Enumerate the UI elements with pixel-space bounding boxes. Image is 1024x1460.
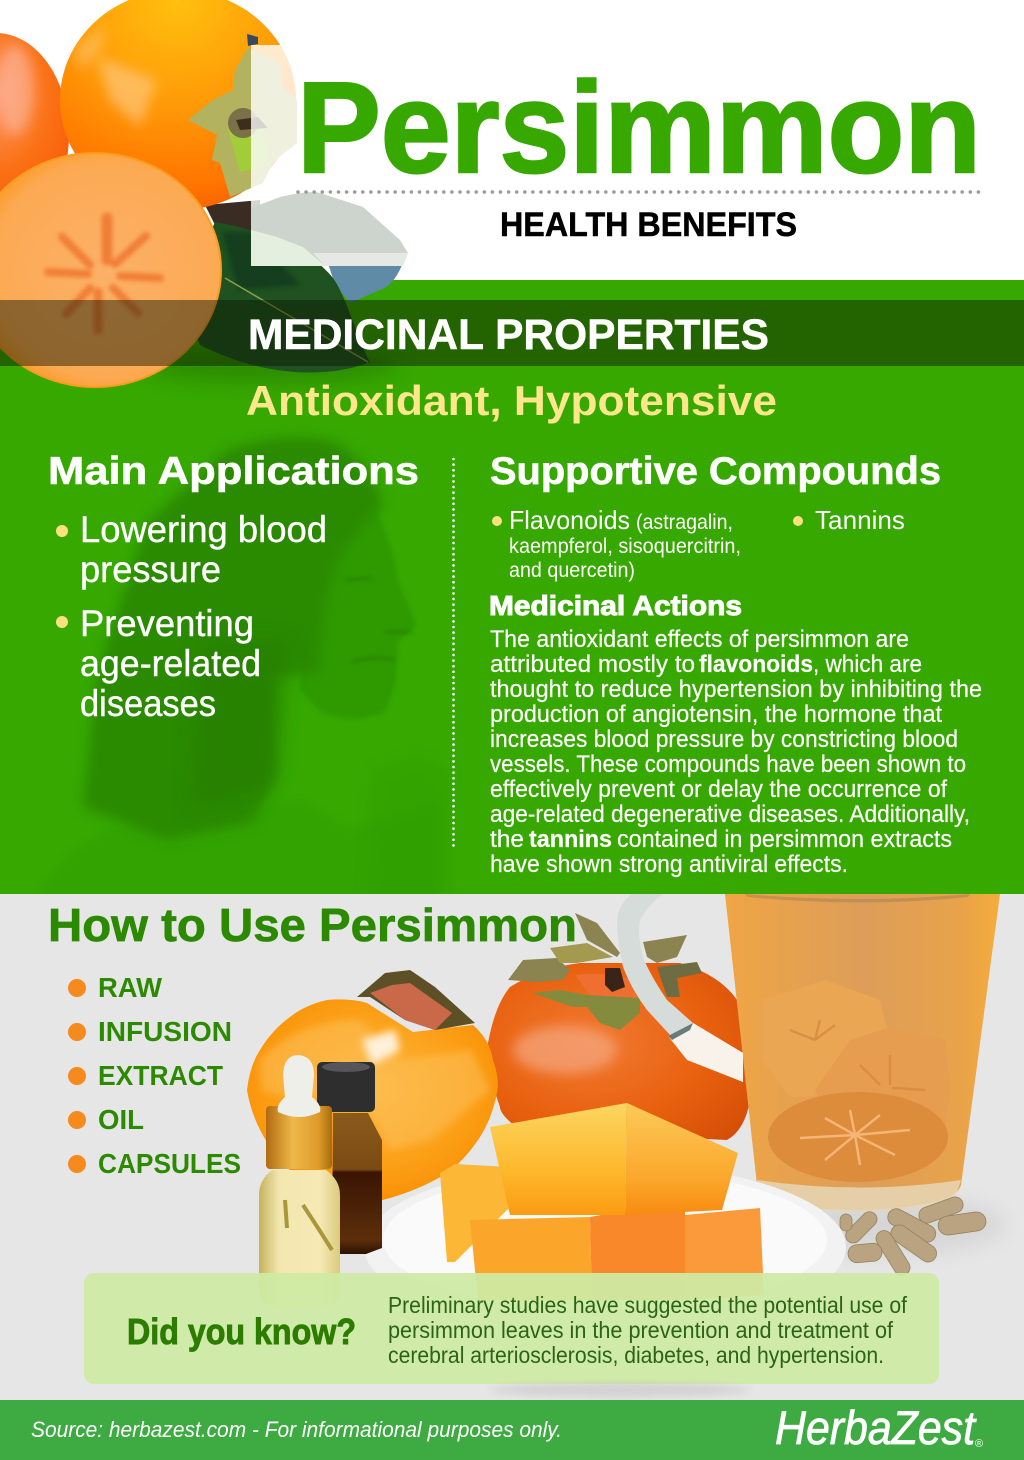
- shadow under main fruit: [205, 200, 260, 232]
- logo: HerbaZest: HerbaZest: [775, 1401, 977, 1454]
- subtitle: HEALTH BENEFITS: [500, 206, 797, 244]
- cut persimmon flesh: [0, 154, 220, 386]
- cut persimmon rim: [0, 152, 222, 388]
- image: woman silhouette in green: [30, 438, 450, 910]
- image: persimmon fruits and leaves, top left: [0, 0, 404, 388]
- blue leaf: [327, 260, 404, 303]
- bullet: lowering blood pressure: Lowering blood: [80, 509, 327, 550]
- capsules: [840, 1195, 987, 1278]
- source note: Source: herbazest.com - For informational purposes only.: [31, 1417, 562, 1442]
- panel: did you know: [84, 1273, 939, 1384]
- bullet: tannins: Tannins: [815, 505, 905, 535]
- subheading: antioxidant, hypotensive: Antioxidant, Hypotensive: [246, 377, 777, 424]
- panel: supportive compounds: [489, 450, 982, 878]
- heading: supportive compounds: Supportive Compounds: [490, 450, 941, 493]
- whole persimmon: [488, 913, 750, 1140]
- bullet: preventing age-related diseases: age-related: [80, 643, 261, 684]
- text block: medicinal actions: tannins: [529, 826, 612, 853]
- text block: medicinal actions: increases blood pressure by constricting blood: [490, 726, 958, 753]
- soft shadow under did you know panel: [490, 1383, 750, 1397]
- text block: medicinal actions: effectively prevent or delay the occurrence of: [490, 776, 947, 803]
- panel: how to use grey background: [0, 894, 1024, 1400]
- heading: medicinal properties: MEDICINAL PROPERTIES: [248, 311, 769, 359]
- bullet: preventing age-related diseases: [56, 603, 261, 724]
- soft shadow behind glass: [775, 1195, 1005, 1255]
- image: persimmon preparations, bottom right: [247, 894, 1005, 1331]
- page background: white header: [0, 0, 1024, 280]
- shadow under fruit: [140, 347, 400, 383]
- list: forms of use: RAW: [98, 972, 163, 1003]
- halved persimmon: [247, 970, 498, 1200]
- panel: main applications: [48, 450, 419, 724]
- plate: [364, 1163, 846, 1331]
- list: forms of use: EXTRACT: [98, 1060, 223, 1091]
- dark green leaf: [180, 222, 370, 372]
- text block: medicinal actions: contained in persimmon extracts: [617, 826, 952, 853]
- stem: [605, 968, 625, 992]
- title: Persimmon: [297, 56, 981, 200]
- text block: medicinal actions: The antioxidant effects of persimmon are: [490, 626, 909, 653]
- text block: medicinal actions: flavonoids: [699, 651, 813, 678]
- bullet: flavonoids: (astragalin,: [636, 511, 733, 534]
- text block: medicinal actions: thought to reduce hypertension by inhibiting the: [490, 676, 982, 703]
- bullet: flavonoids: kaempferol, sisoquercitrin,: [509, 535, 741, 558]
- bullet: flavonoids: [492, 505, 741, 582]
- oil dropper bottle: [259, 1055, 340, 1307]
- text block: did you know: persimmon leaves in the prevention and treatment of: [388, 1317, 894, 1343]
- bullet: flavonoids: and quercetin): [509, 559, 635, 582]
- text block: medicinal actions: the: [490, 826, 524, 853]
- panel: medicinal properties green background: [0, 280, 1024, 894]
- seed star: [48, 218, 160, 330]
- dried slices in glass: [762, 980, 892, 1097]
- band: medicinal properties dark strip: [0, 300, 1024, 366]
- text block: did you know: cerebral arteriosclerosis, diabetes, and hypertension.: [388, 1342, 884, 1368]
- text block: medicinal actions: , which are: [813, 651, 922, 678]
- translucent white overlay behind title: [251, 45, 1024, 266]
- heading: medicinal actions: Medicinal Actions: [489, 590, 742, 621]
- text block: did you know: Preliminary studies have suggested the potential use of: [388, 1292, 908, 1318]
- heading: did you know: Did you know?: [127, 1311, 356, 1352]
- vertical dotted divider: [452, 459, 455, 848]
- heading: main applications: Main Applications: [48, 450, 419, 493]
- text block: medicinal actions: attributed mostly to: [490, 651, 695, 678]
- text block: medicinal actions: vessels. These compounds have been shown to: [490, 751, 966, 778]
- calyx: [188, 34, 297, 197]
- text block: medicinal actions: [490, 626, 982, 878]
- registered mark: ®: [975, 1438, 983, 1450]
- main persimmon: [60, 0, 296, 210]
- text block: medicinal actions: age-related degenerative diseases. Additionally,: [490, 801, 970, 828]
- heading: how to use persimmon: How to Use Persimmon: [48, 899, 577, 951]
- list: forms of use: [68, 972, 241, 1179]
- text block: medicinal actions: production of angiotensin, the hormone that: [490, 701, 942, 728]
- bullet: preventing age-related diseases: diseases: [80, 683, 216, 724]
- list: forms of use: OIL: [98, 1104, 144, 1135]
- footer bar: [0, 1400, 1024, 1460]
- list: forms of use: CAPSULES: [98, 1148, 241, 1179]
- dotted divider under title: [298, 190, 982, 194]
- text block: medicinal actions: have shown strong antiviral effects.: [490, 851, 848, 878]
- bullet: flavonoids: Flavonoids: [509, 505, 630, 535]
- sepals: [508, 913, 702, 1030]
- amber bottle: [317, 1062, 382, 1254]
- grey leaf under overlay: [251, 192, 408, 266]
- glass of persimmon tea: [725, 894, 1000, 1212]
- text block: did you know: [388, 1292, 908, 1368]
- bullet: lowering blood pressure: pressure: [80, 549, 221, 590]
- persimmon chunks: [440, 1103, 764, 1300]
- list: forms of use: INFUSION: [98, 1016, 232, 1047]
- left persimmon: [0, 33, 69, 237]
- bullet: preventing age-related diseases: Preventing: [80, 603, 254, 644]
- bullet: lowering blood pressure: [56, 509, 327, 590]
- glass handle: [617, 894, 743, 1082]
